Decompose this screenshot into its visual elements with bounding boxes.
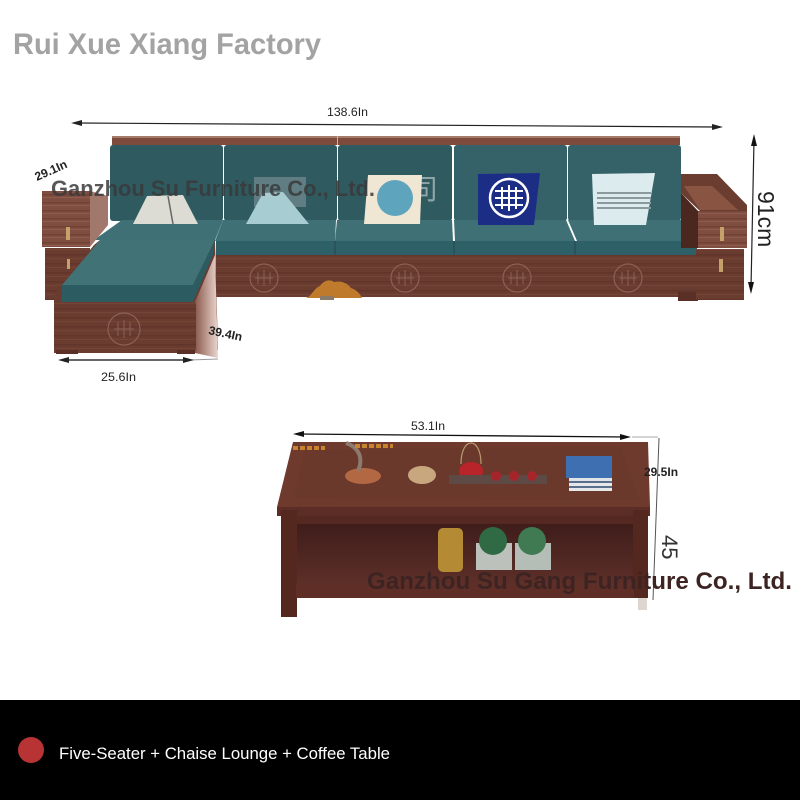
- seat cushions: [94, 220, 697, 255]
- sofa base with carved medallions: [216, 255, 698, 301]
- dimension: table width: 53.1In: [411, 419, 445, 433]
- pillow: navy with white emblem: [478, 173, 540, 225]
- decor: tea tray with cups: [449, 471, 547, 484]
- pillow: cream with blue circle: [364, 175, 422, 224]
- back cushions: [110, 145, 681, 221]
- decor: golden ornament: [438, 528, 463, 572]
- dimension: table depth and height line: 45: [657, 535, 682, 559]
- option label: Five-Seater + Chaise Lounge + Coffee Table: [59, 744, 390, 763]
- footer bar: [0, 700, 800, 800]
- table top: [277, 442, 650, 524]
- dimension: chaise depth label: 39.4In: [207, 323, 244, 344]
- coffee table illustration: [277, 442, 650, 617]
- dimension: overall sofa width: [71, 105, 723, 130]
- dimension: table depth and height line: [644, 438, 682, 600]
- shelf opening: [296, 523, 634, 587]
- pillow: white: [133, 195, 198, 224]
- dimension: table depth and height line: 29.5In: [644, 465, 678, 479]
- dimension: chaise width: [58, 357, 218, 384]
- decor: green jars: [476, 527, 551, 570]
- sofa illustration: [42, 136, 747, 358]
- dimension: sofa height: [748, 134, 779, 294]
- pillow: pale with grey stripes: [592, 173, 655, 225]
- dimension: side depth label: 29.1In: [33, 157, 69, 184]
- shelf rail: [296, 585, 634, 598]
- dimension: overall sofa width: 138.6In: [327, 105, 368, 119]
- decor: incense burner: [408, 466, 436, 484]
- chaise lounge: [54, 240, 218, 358]
- title: Rui Xue Xiang Factory: [13, 28, 321, 61]
- sofa top rail: [112, 136, 680, 145]
- watermark: upper: Ganzhou Su Furniture Co., Ltd.: [51, 176, 375, 201]
- left side cabinet: [42, 191, 108, 300]
- decor: red teapot: [459, 443, 483, 480]
- dimension: chaise width: 25.6In: [101, 370, 136, 384]
- faint watermark character: 司: [410, 174, 438, 205]
- dimension: table width: [293, 419, 658, 440]
- dimension: sofa height: 91cm: [753, 191, 779, 247]
- pillow: light blue: [246, 177, 309, 224]
- table legs: [281, 510, 648, 617]
- decor: bonsai with orange leaves: [293, 443, 393, 484]
- right side cabinet: [681, 174, 747, 300]
- color swatch: [18, 737, 44, 763]
- watermark: lower: Ganzhou Su Gang Furniture Co., Ltd.: [367, 568, 792, 595]
- decor: stack of books: [566, 456, 612, 491]
- dried flower decoration: [306, 280, 362, 300]
